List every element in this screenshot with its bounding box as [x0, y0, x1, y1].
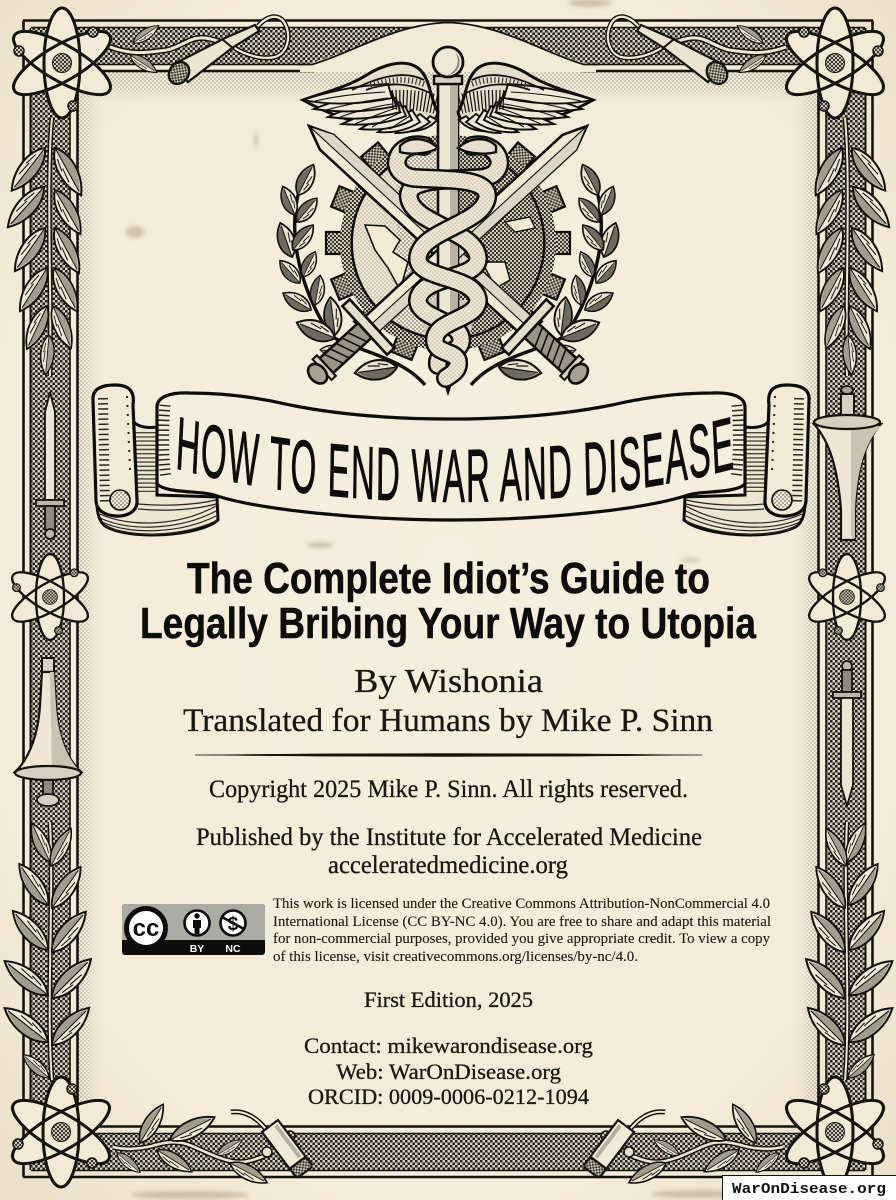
- icon: atom middle right: [802, 554, 892, 640]
- left upper laurel vine: [1, 118, 89, 376]
- edition line: First Edition, 2025: [364, 987, 533, 1012]
- license text: [273, 896, 771, 965]
- publisher block: acceleratedmedicine.org: [328, 852, 568, 879]
- author lines: Translated for Humans by Mike P. Sinn: [183, 703, 713, 739]
- watermark: [722, 1176, 896, 1200]
- left laurel wreath: [273, 161, 425, 385]
- publisher block: [196, 824, 702, 879]
- icon: Creative Commons BY-NC badge: [122, 904, 265, 955]
- license text: of this license, visit creativecommons.org/licenses/by-nc/4.0.: [273, 949, 638, 965]
- banner fold hatching: [164, 405, 738, 478]
- snake left: [397, 145, 487, 378]
- right upper laurel vine: [808, 118, 896, 376]
- crossed sword from top right: [289, 102, 609, 403]
- top right horn and vine ornament: [608, 17, 786, 88]
- icon: left side horn: [15, 658, 81, 806]
- icon: Creative Commons BY-NC badge: NC: [225, 943, 241, 955]
- icon: atom top right: [778, 8, 892, 118]
- copyright line: Copyright 2025 Mike P. Sinn. All rights reserved.: [209, 776, 688, 803]
- banner right curl: [684, 385, 809, 535]
- contact block: Web: WarOnDisease.org: [336, 1059, 561, 1084]
- halftone inner vignette: [78, 71, 818, 1126]
- contact block: ORCID: 0009-0006-0212-1094: [308, 1084, 589, 1109]
- subtitle: The Complete Idiot’s Guide to: [187, 554, 710, 603]
- watermark: WarOnDisease.org: [732, 1181, 886, 1198]
- license text: International License (CC BY-NC 4.0). You are free to share and adapt this material: [273, 914, 771, 930]
- icon: left side sword: [36, 392, 64, 539]
- left band: [24, 20, 78, 1177]
- snake right: [409, 145, 499, 365]
- icon: Creative Commons BY-NC badge: cc: [133, 915, 159, 942]
- icon: atom bottom left: [4, 1077, 118, 1187]
- globe: [352, 147, 544, 339]
- banner left curl: [93, 385, 218, 535]
- icon: atom bottom right: [778, 1077, 892, 1187]
- crossed sword from top left: [287, 102, 607, 403]
- subtitle: [140, 554, 756, 648]
- banner main ribbon: [157, 393, 745, 520]
- license text: This work is licensed under the Creative Commons Attribution-NonCommercial 4.0: [273, 896, 770, 912]
- bottom left syringe and vine ornament: [113, 1101, 313, 1189]
- bottom band: [23, 1126, 873, 1177]
- license text: for non-commercial purposes, provided you give appropriate credit. To view a copy: [273, 931, 771, 947]
- contact block: [304, 1033, 593, 1109]
- right lower laurel vine: [800, 821, 896, 1082]
- bottom right syringe and vine ornament: [583, 1101, 783, 1189]
- top band with central arch: [23, 20, 873, 72]
- left lower laurel vine: [0, 821, 97, 1082]
- top left horn and vine ornament: [110, 17, 288, 88]
- snakes: [397, 139, 499, 378]
- publisher block: Published by the Institute for Accelerated Medicine: [196, 824, 702, 851]
- contact block: Contact: mikewarondisease.org: [304, 1033, 593, 1058]
- right wing: [458, 63, 593, 133]
- gear: [326, 135, 570, 360]
- right laurel wreath: [471, 161, 623, 385]
- right band: [818, 20, 872, 1177]
- icon: atom middle left: [5, 554, 95, 640]
- icon: atom top left: [5, 8, 119, 118]
- left wing: [303, 63, 438, 133]
- emblem: winged staff, snakes, swords, globe and gear: [273, 47, 623, 403]
- icon: Creative Commons BY-NC badge: BY: [190, 943, 204, 955]
- icon: right side sword: [833, 661, 861, 806]
- title banner ribbon: [91, 383, 811, 536]
- icon: right side horn: [814, 386, 881, 540]
- subtitle: Legally Bribing Your Way to Utopia: [140, 599, 756, 648]
- author lines: [183, 663, 713, 739]
- banner title: HOW TO END WAR AND DISEASE: [178, 417, 734, 502]
- icon: Creative Commons BY-NC badge: $: [228, 914, 239, 935]
- snake heads: [400, 139, 496, 154]
- staff: [433, 47, 463, 392]
- author lines: By Wishonia: [354, 663, 543, 700]
